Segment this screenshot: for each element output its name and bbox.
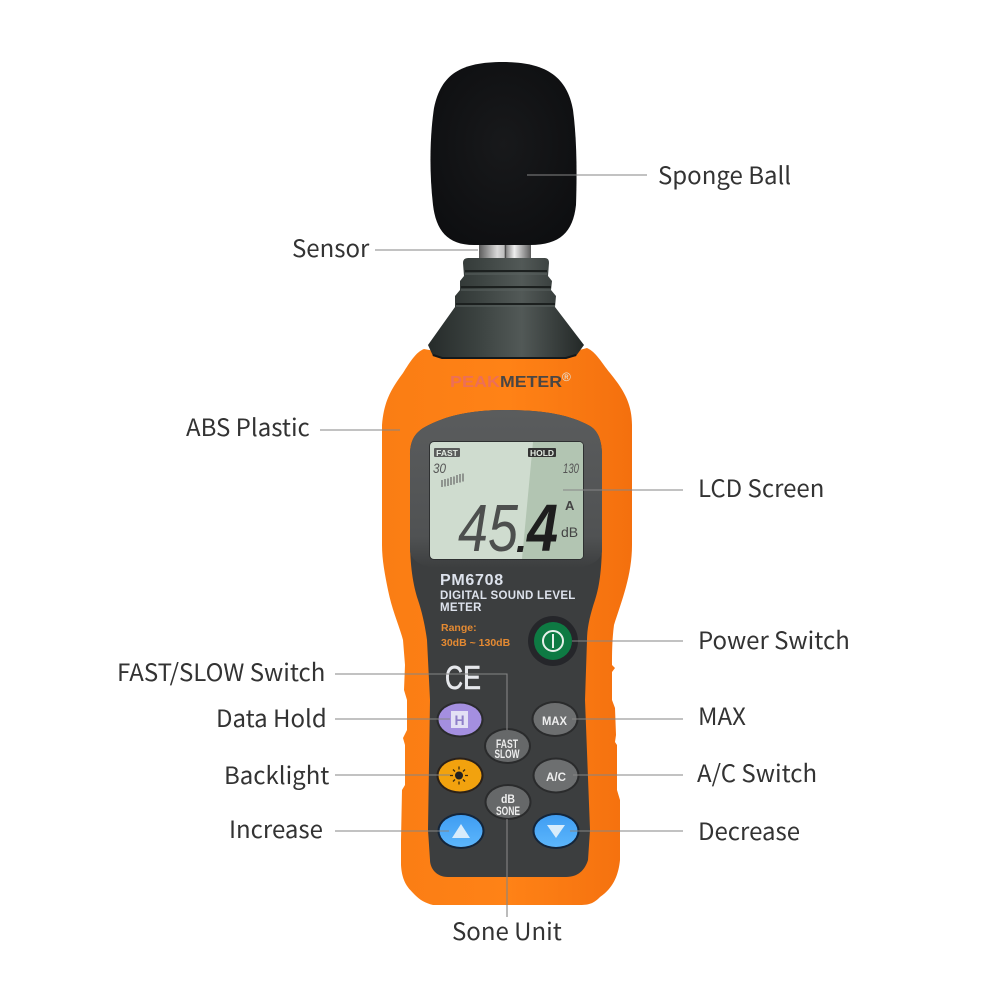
button: fast slow: SLOW <box>494 747 520 761</box>
label: Sponge Ball: Sponge Ball <box>658 156 791 191</box>
button: fast slow: FAST <box>496 737 518 751</box>
label: LCD Screen: LCD Screen <box>698 469 824 504</box>
LCD reading: 4 <box>525 491 558 566</box>
button: fast slow <box>484 728 531 764</box>
model text: PM6708 <box>440 572 504 589</box>
CE mark: C <box>445 659 463 696</box>
label: Power Switch: Power Switch <box>698 621 850 656</box>
LCD screen <box>429 441 584 566</box>
range text: 30dB ~ 130dB <box>441 637 511 649</box>
LCD units: A <box>565 498 575 513</box>
button: db sone: SONE <box>496 804 520 818</box>
dark front panel <box>410 410 602 877</box>
label: MAX: MAX <box>698 697 746 732</box>
LCD FAST indicator: FAST <box>436 448 459 458</box>
button: db sone <box>484 784 532 820</box>
button: db sone: dB <box>501 792 515 806</box>
sensor metal ring <box>479 245 531 259</box>
LCD reading: . <box>516 517 527 561</box>
LCD reading: 45 <box>458 491 519 566</box>
label: FAST/SLOW Switch: FAST/SLOW Switch <box>117 653 325 688</box>
label: Sensor: Sensor <box>292 229 370 264</box>
button: max: MAX <box>542 714 567 728</box>
button: backlight <box>436 758 484 794</box>
range text: Range: <box>441 622 477 634</box>
model text <box>440 572 576 614</box>
LCD scale <box>433 460 579 476</box>
icon: sponge ball <box>430 62 577 245</box>
LCD scale: 130 <box>563 460 579 476</box>
label: Increase: Increase <box>229 810 323 845</box>
button: a/c: A/C <box>546 770 566 784</box>
model text: METER <box>440 602 482 614</box>
button: max <box>532 701 578 737</box>
brand logo: PEAK <box>450 374 501 391</box>
LCD units: dB <box>561 524 578 540</box>
LCD bezel <box>410 410 602 568</box>
brand logo: ® <box>562 370 571 384</box>
button: data hold <box>436 702 484 738</box>
power switch <box>528 616 578 666</box>
button: data hold: H <box>454 712 465 728</box>
label: ABS Plastic: ABS Plastic <box>186 408 310 443</box>
button: increase <box>438 813 484 849</box>
CE mark <box>445 659 481 696</box>
label: Data Hold: Data Hold <box>216 699 327 734</box>
label: Sone Unit <box>452 819 562 947</box>
button: a/c <box>532 758 580 794</box>
label: Decrease: Decrease <box>698 812 800 847</box>
LCD scale: 30 <box>433 460 446 476</box>
LCD HOLD indicator: HOLD <box>530 448 554 458</box>
rubber neck <box>428 258 584 358</box>
label: Sone Unit: Sone Unit <box>452 912 562 947</box>
LCD bar graph <box>442 474 463 487</box>
model text: DIGITAL SOUND LEVEL <box>440 590 576 602</box>
orange body <box>382 348 632 905</box>
button: decrease <box>532 813 580 849</box>
label: A/C Switch: A/C Switch <box>697 754 817 789</box>
brand logo <box>450 370 571 391</box>
LCD units <box>561 498 578 540</box>
range text <box>441 622 511 649</box>
label: Backlight: Backlight <box>224 756 329 791</box>
CE mark: E <box>463 659 481 696</box>
brand logo: METER <box>500 374 562 391</box>
label: FAST/SLOW Switch <box>117 653 507 730</box>
